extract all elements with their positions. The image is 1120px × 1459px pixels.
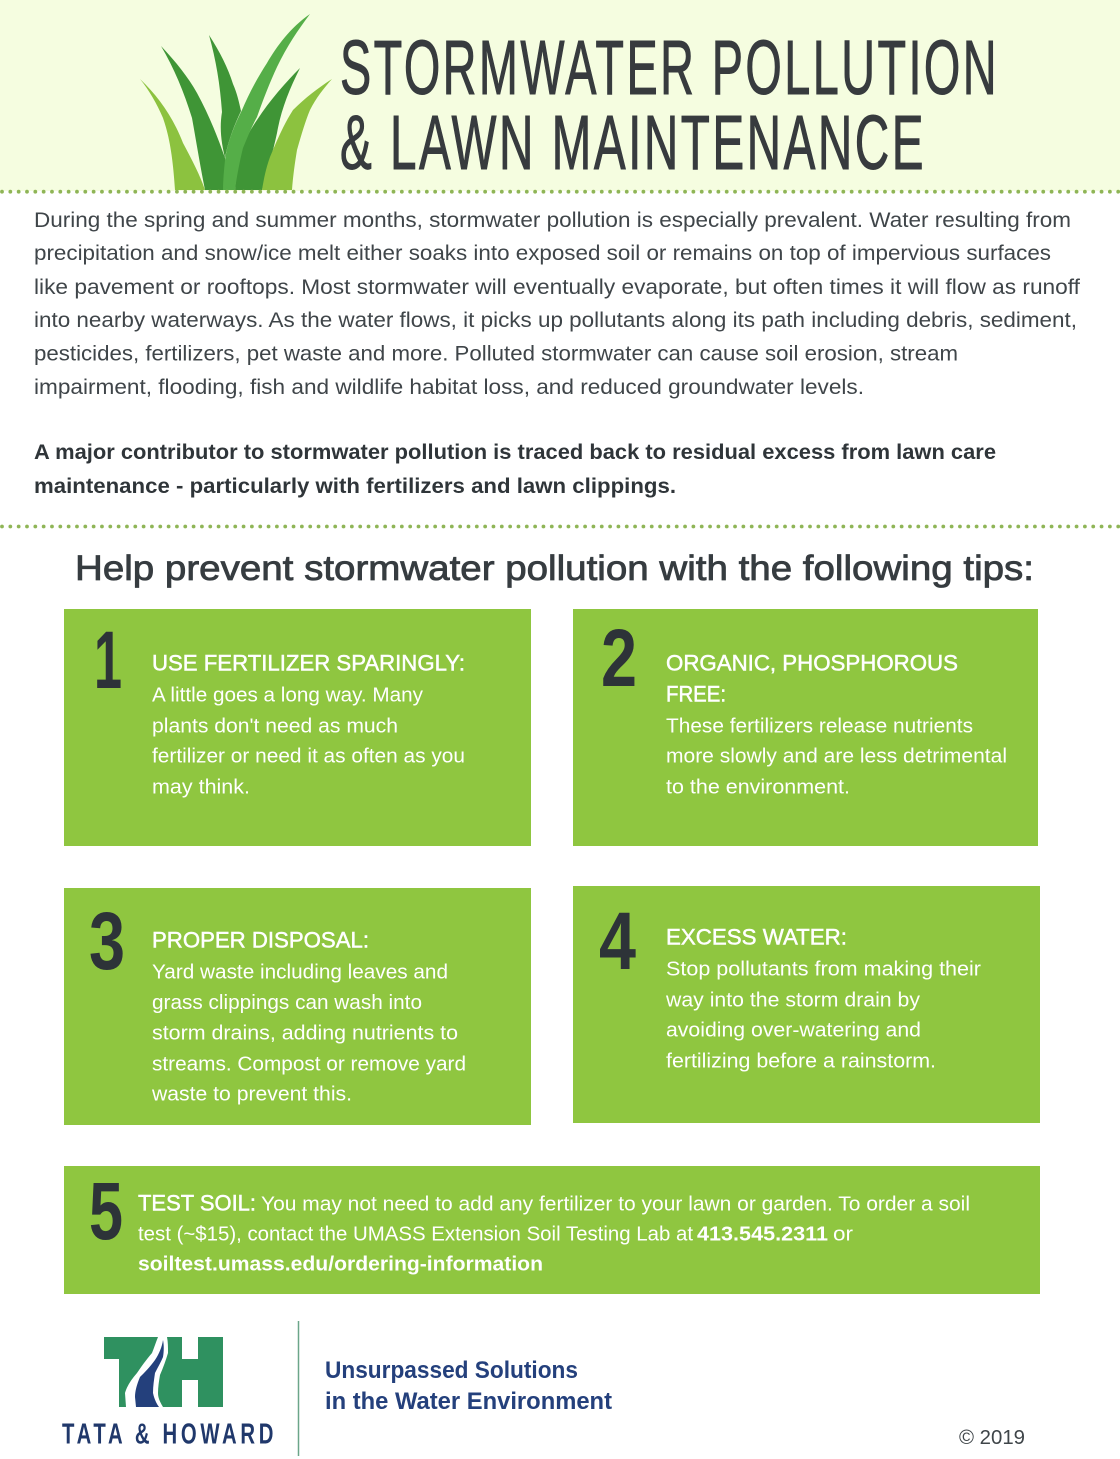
panel: tip 1: 1: [94, 615, 122, 706]
panel: tip 1: plants don't need as much: [152, 714, 398, 737]
panel: tip 5: TEST SOIL:: [138, 1190, 256, 1216]
panel: tip 4: avoiding over-watering and: [666, 1018, 921, 1041]
icon: grass: [140, 14, 332, 190]
panel: tip 2: more slowly and are less detrimental: [666, 744, 1007, 767]
intro paragraph: precipitation and snow/ice melt either soaks into exposed soil or remains on top of impervious surfaces: [34, 241, 1051, 265]
panel: tip 3: grass clippings can wash into: [152, 991, 422, 1014]
panel: tip 5: 413.545.2311: [697, 1222, 828, 1246]
panel: tip 2: to the environment.: [666, 775, 850, 798]
bold statement: A major contributor to stormwater pollution is traced back to residual excess from lawn care: [34, 440, 996, 464]
panel: tip 2: 2: [601, 613, 637, 704]
panel: tip 1: A little goes a long way. Many: [152, 683, 424, 706]
panel: tip 3: storm drains, adding nutrients to: [152, 1021, 458, 1044]
panel: tip 3: streams. Compost or remove yard: [152, 1052, 466, 1075]
panel: tip 4: [573, 886, 1040, 1123]
panel: tip 3: Yard waste including leaves and: [152, 960, 448, 983]
panel: tip 4: 4: [599, 896, 636, 987]
panel: tip 4: Stop pollutants from making their: [666, 957, 981, 980]
panel: tip 3: waste to prevent this.: [151, 1082, 352, 1105]
panel: tip 4: fertilizing before a rainstorm.: [666, 1049, 936, 1072]
panel: tip 5: 5: [89, 1166, 123, 1257]
panel: tip 1: USE FERTILIZER SPARINGLY:: [152, 650, 465, 676]
panel: tip 5: or: [833, 1222, 853, 1245]
panel: tip 5: You may not need to add any fertilizer to your lawn or garden. To order a soil: [261, 1192, 970, 1215]
panel: tip 3: PROPER DISPOSAL:: [152, 928, 369, 952]
panel: tip 3: 3: [89, 896, 125, 987]
copyright: © 2019: [959, 1427, 1025, 1449]
intro paragraph: impairment, flooding, fish and wildlife habitat loss, and reduced groundwater levels.: [34, 375, 864, 399]
title: [340, 25, 999, 186]
intro paragraph: like pavement or rooftops. Most stormwater will eventually evaporate, but often times it will flow as runoff: [34, 275, 1080, 299]
header banner: [0, 0, 1120, 191]
tips heading: Help prevent stormwater pollution with the following tips:: [75, 549, 1034, 588]
panel: tip 5: soiltest.umass.edu/ordering-information: [138, 1252, 543, 1276]
panel: tip 4: EXCESS WATER:: [666, 924, 847, 950]
panel: tip 2: ORGANIC, PHOSPHOROUS: [666, 650, 958, 676]
intro paragraph: During the spring and summer months, stormwater pollution is especially prevalent. Water resulting from: [34, 208, 1071, 232]
panel: tip 2: FREE:: [666, 682, 726, 706]
panel: tip 1: [64, 609, 531, 846]
intro paragraph: pesticides, fertilizers, pet waste and more. Polluted stormwater can cause soil erosion, stream: [34, 342, 958, 366]
panel: tip 5: test (~$15), contact the UMASS Extension Soil Testing Lab at: [138, 1222, 693, 1245]
intro paragraph: into nearby waterways. As the water flows, it picks up pollutants along its path including debris, sediment,: [34, 308, 1077, 332]
panel: tip 5: [64, 1166, 1040, 1294]
bold statement: maintenance - particularly with fertilizers and lawn clippings.: [34, 474, 676, 498]
panel: tip 1: fertilizer or need it as often as you: [152, 744, 465, 767]
logo: Tata & Howard: [62, 1337, 273, 1450]
tagline: Unsurpassed Solutions: [325, 1357, 578, 1384]
panel: tip 2: These fertilizers release nutrients: [666, 714, 973, 737]
logo: Tata & Howard: TATA & HOWARD: [62, 1418, 273, 1450]
panel: tip 3: [64, 888, 531, 1125]
tagline: in the Water Environment: [325, 1388, 612, 1415]
panel: tip 2: [573, 609, 1038, 846]
tagline: [325, 1357, 612, 1415]
intro paragraph: [34, 208, 1080, 399]
panel: tip 1: may think.: [152, 775, 250, 798]
bold statement: [34, 440, 996, 498]
panel: tip 4: way into the storm drain by: [665, 988, 921, 1011]
